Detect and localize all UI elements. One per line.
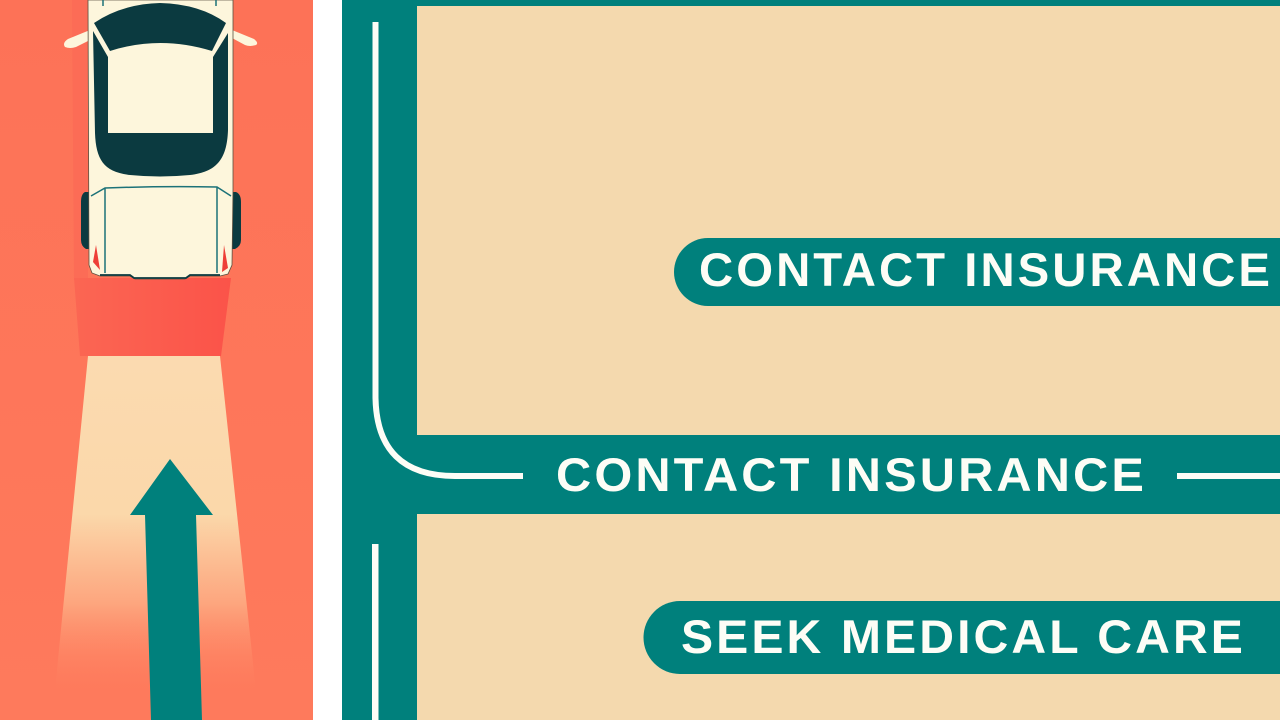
pill: seek medical care: SEEK MEDICAL CARE (681, 610, 1246, 663)
teal horizontal road (342, 435, 1280, 514)
icon: car top view (64, 0, 257, 279)
pill: contact insurance: CONTACT INSURANCE (699, 243, 1273, 296)
panel: road (0, 0, 313, 720)
teal vertical road (342, 0, 417, 720)
road line: curved upper (376, 22, 523, 476)
tail lights (93, 245, 100, 270)
road line: lower (372, 544, 378, 720)
grille marks (103, 0, 216, 6)
arrow (130, 459, 213, 720)
car body (88, 0, 233, 279)
windows (94, 3, 226, 51)
panel: map background (342, 0, 1280, 720)
label: middle contact insurance: CONTACT INSURANCE (556, 448, 1147, 501)
pill: seek medical care (644, 601, 1280, 674)
road light beam (54, 356, 257, 700)
trunk lines (91, 187, 231, 273)
wheels (81, 192, 92, 249)
road line: right dash (1177, 473, 1280, 479)
mirrors (64, 30, 90, 48)
